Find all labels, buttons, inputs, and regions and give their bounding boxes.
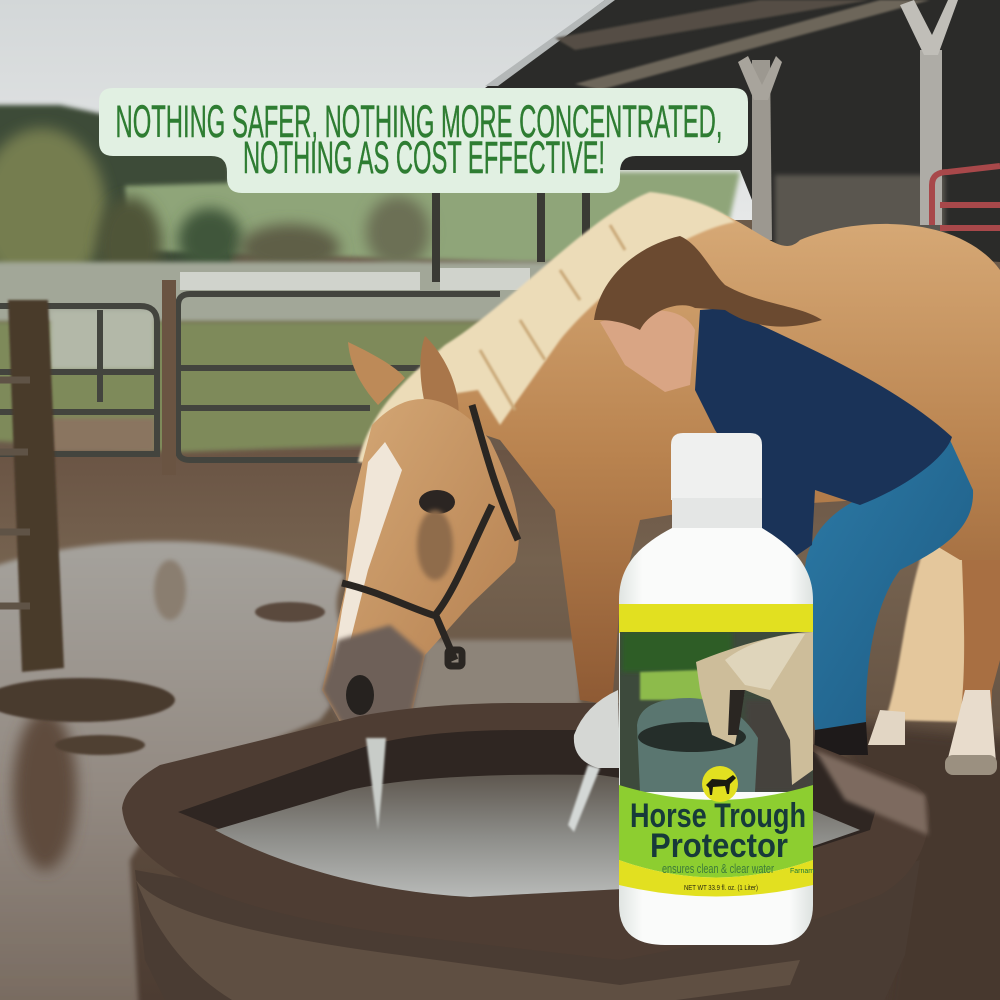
woman: boot (814, 722, 868, 755)
background: green paddock (0, 310, 500, 452)
trough: rim (122, 703, 930, 960)
measuring cup (574, 690, 620, 768)
horse: head (322, 336, 519, 736)
ground: mud (0, 450, 1000, 1000)
bottle: neck (672, 498, 762, 530)
woman: hair (594, 236, 822, 330)
bottle: tagline: ensures clean & clear water (662, 861, 774, 876)
horse: halter (342, 405, 518, 666)
trough: inner wall (178, 730, 880, 897)
horse: mane (358, 192, 735, 475)
ground: dark mud bottom right (830, 720, 1000, 1000)
bottle: net weight: NET WT 33.9 fl. oz. (1 Liter) (684, 885, 758, 892)
water: falling drip (366, 738, 386, 830)
horse: body and neck (440, 205, 1000, 705)
trough: water (215, 775, 860, 897)
puddle reflecting sky (0, 541, 580, 1000)
bottle: lower yellow band (619, 860, 813, 896)
woman: jeans (804, 440, 973, 730)
callout: bubble (99, 88, 748, 193)
bottle: brand mark: Farnam (790, 868, 814, 875)
background: barn (432, 0, 1000, 282)
bottle: top yellow band (619, 604, 813, 633)
product bottle: Protector (650, 827, 788, 865)
bottle: cap (671, 433, 762, 500)
fence: wooden foreground post (0, 300, 64, 672)
background: distant landscape (0, 105, 740, 322)
headline callout (99, 88, 748, 193)
fence post (162, 280, 176, 475)
water: poured stream (568, 765, 600, 832)
bottle: horse logo (702, 766, 738, 802)
trough: rim highlight (815, 750, 928, 835)
product bottle (619, 433, 814, 945)
bottle: label photo (620, 632, 813, 792)
background: sky (0, 0, 1000, 220)
trough: lower base (135, 860, 920, 1000)
horse: hind leg and tail (868, 545, 1000, 775)
fence: paddock rails (0, 294, 500, 460)
woman: face (600, 310, 695, 392)
bottle: green panel (619, 785, 813, 878)
woman: jacket (695, 308, 952, 560)
bottle: body (619, 528, 813, 945)
callout: heading line 2: NOTHING AS COST EFFECTIVE! (243, 132, 605, 183)
bottle: product name: Horse Trough (630, 797, 806, 835)
woman (594, 236, 973, 755)
